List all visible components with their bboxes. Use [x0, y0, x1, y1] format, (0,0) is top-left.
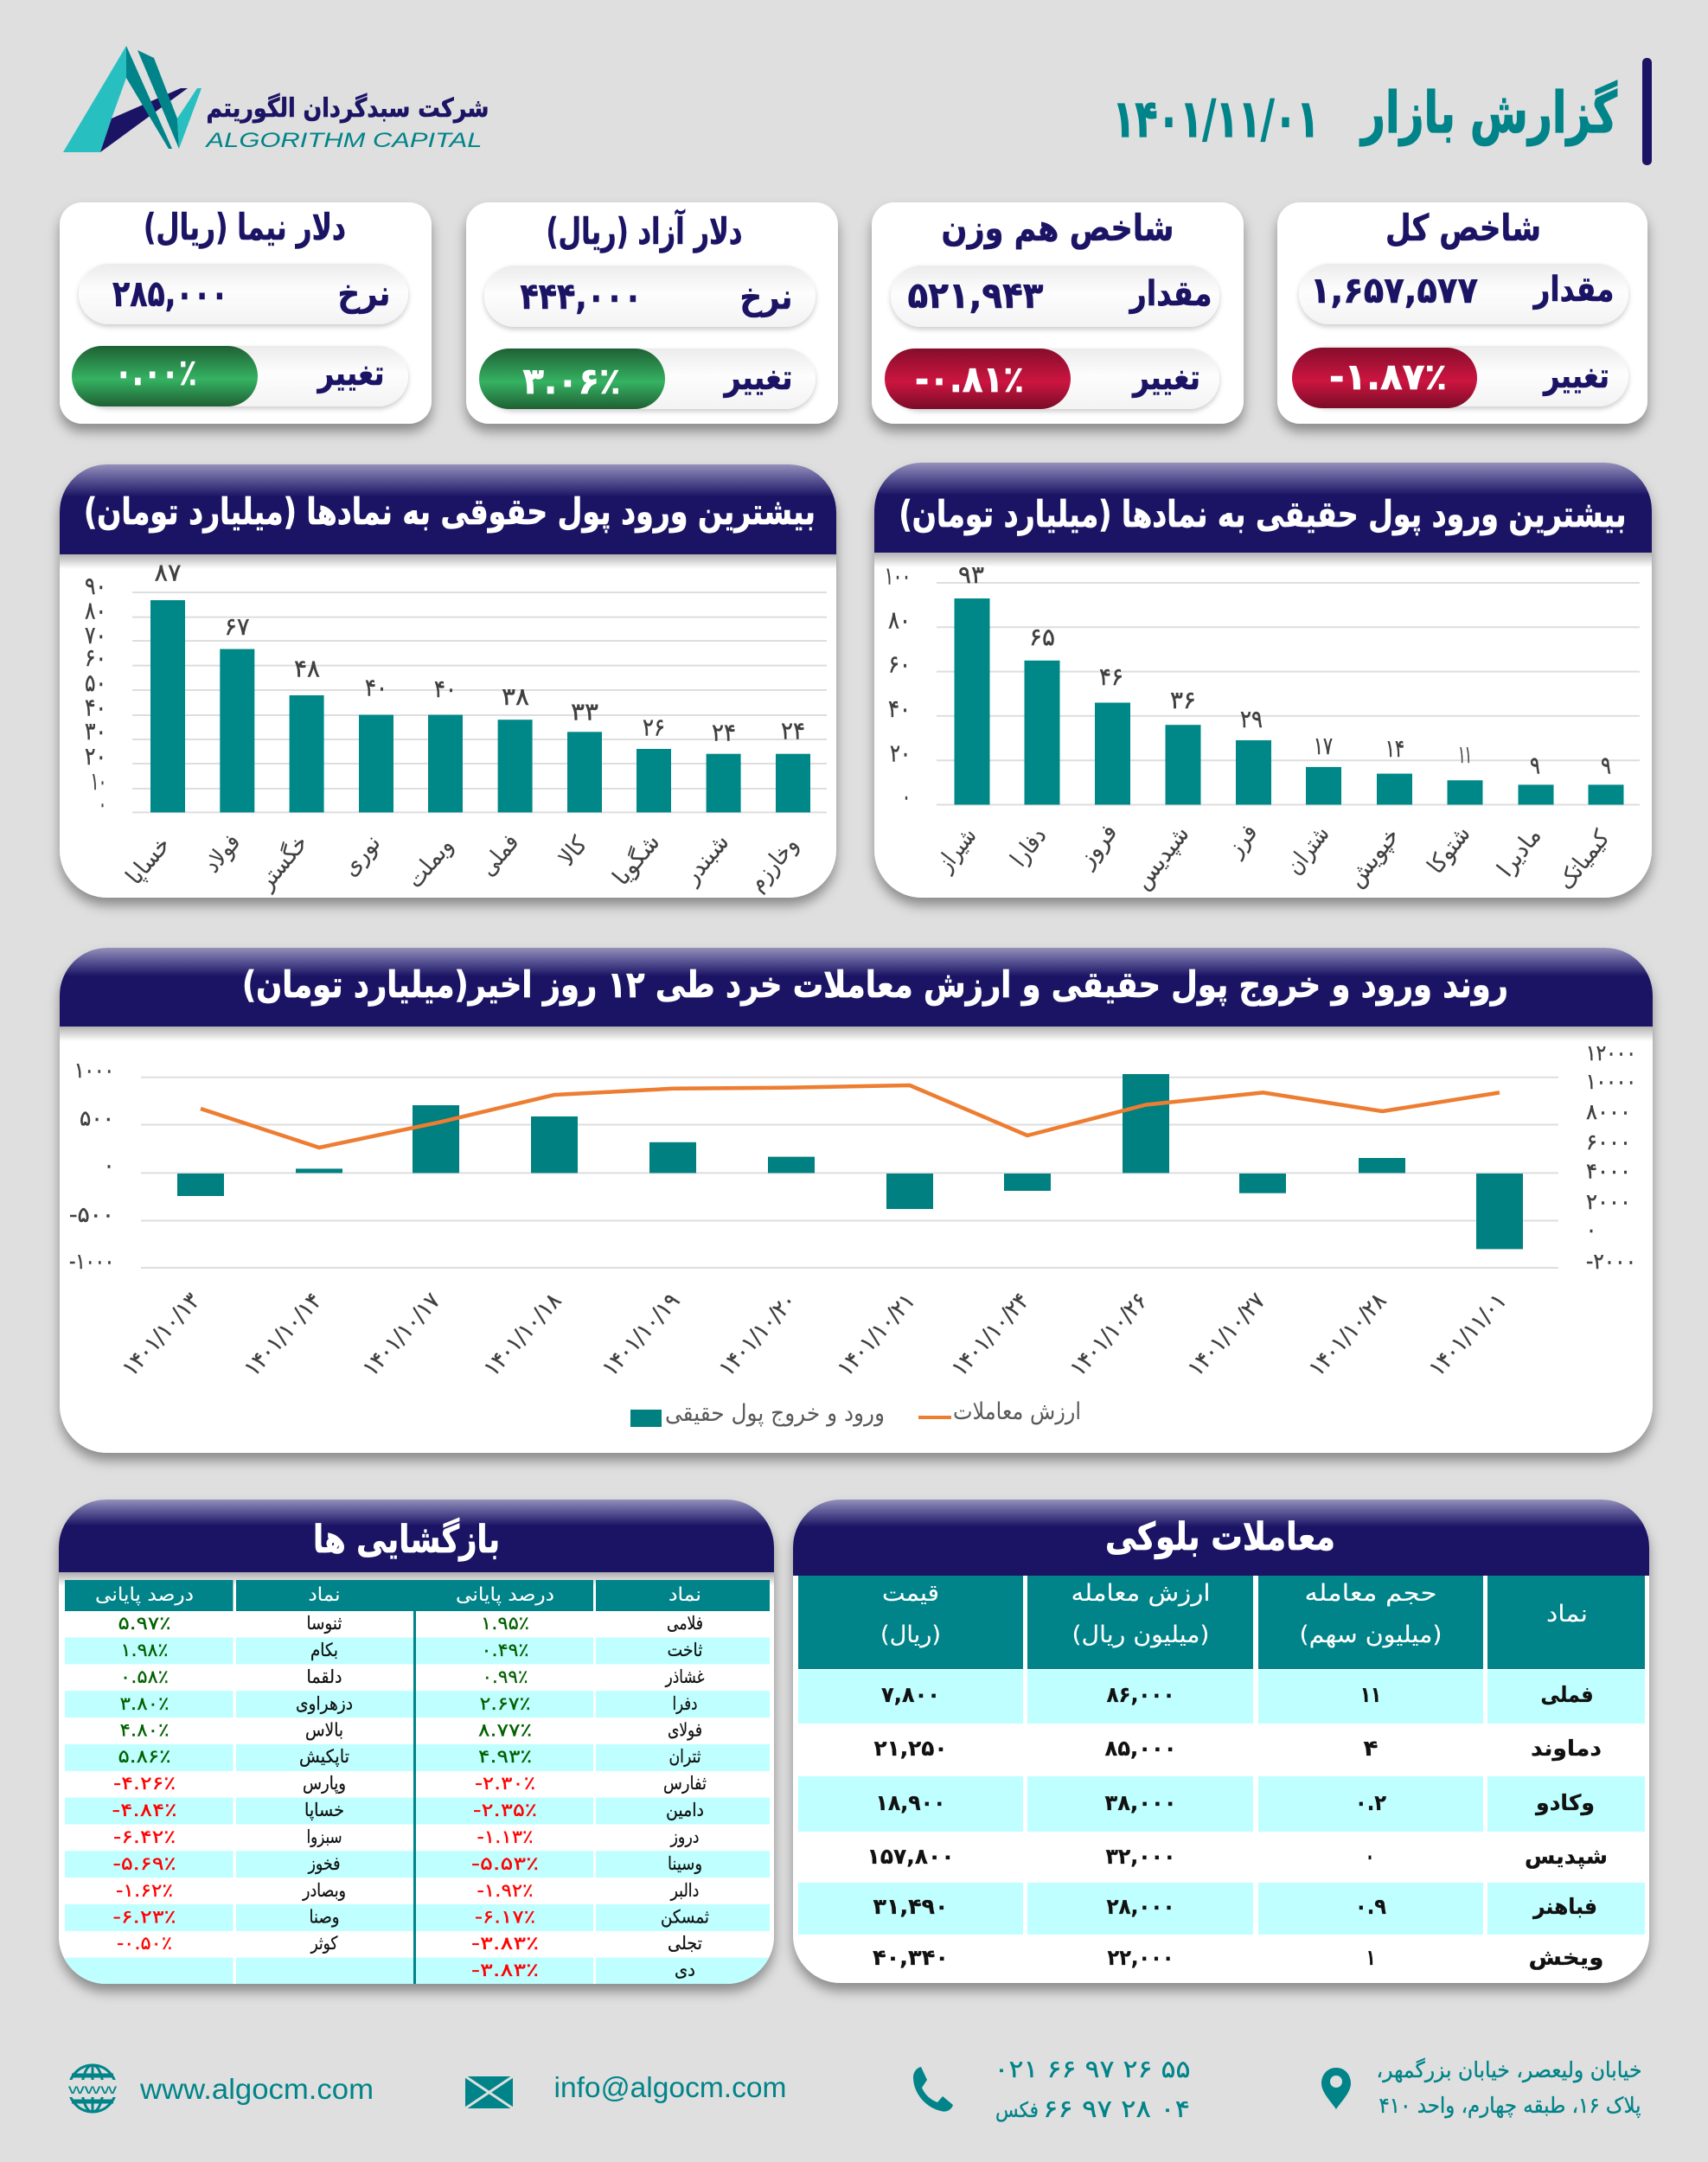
table: reopened symbols: -۲.۳۵٪: [473, 1800, 537, 1820]
bar chart: legal money inflow: خگستر: [251, 829, 313, 896]
card: free dollar: تغییر: [723, 358, 792, 398]
bar chart: legal money inflow: ۳۰: [85, 717, 106, 745]
combo chart: real money flow and trade value: ۱۴۰۱/۱۰/۲۱: [833, 1289, 920, 1381]
bar chart: legal money inflow: ۹۰: [85, 572, 106, 600]
table: block trades: ۱: [1366, 1945, 1375, 1970]
table: reopened symbols: کوثر: [310, 1933, 337, 1954]
table: reopened symbols: فخوز: [308, 1853, 341, 1874]
bar chart: legal money inflow: وخارزم: [743, 832, 803, 897]
card: free dollar: ۴۴۴,۰۰۰: [521, 275, 642, 317]
combo chart: real money flow and trade value: -۱۰۰۰: [69, 1249, 114, 1274]
table: block trades: (میلیون ریال): [1072, 1622, 1209, 1648]
table: reopened symbols: وبصادر: [302, 1880, 346, 1901]
table: reopened symbols: -۱.۹۲٪: [477, 1880, 533, 1901]
combo chart: real money flow and trade value: ۱۴۰۱/۱۰/۲۰: [714, 1289, 802, 1381]
table: reopened symbols: ۱.۹۵٪: [481, 1613, 529, 1634]
table: block trades: ویخش: [1529, 1945, 1603, 1971]
table: reopened symbols: ۱.۹۸٪: [121, 1640, 168, 1660]
card: NIMA dollar: تغییر: [317, 354, 384, 393]
combo chart: real money flow and trade value: ۱۴۰۱/۱۱/۰۱: [1424, 1289, 1512, 1381]
table: block trades: حجم معامله: [1304, 1580, 1437, 1607]
card: total index: شاخص کل: [1385, 207, 1541, 250]
table: reopened symbols: ۵.۹۷٪: [118, 1613, 171, 1634]
combo chart: real money flow and trade value: ۱۰۰۰: [74, 1058, 114, 1083]
bar chart: real money inflow: ۹۳: [958, 560, 984, 589]
table: reopened symbols: دزهراوی: [296, 1693, 353, 1714]
bar chart: legal money inflow: وبملت: [401, 833, 458, 893]
table: block trades: فباهنر: [1532, 1894, 1597, 1920]
table: reopened symbols: ۴.۸۰٪: [119, 1719, 170, 1740]
chart legend: ارزش معاملات: [953, 1398, 1081, 1425]
title: market report and date: گزارش بازار: [1359, 80, 1617, 146]
bar chart: legal money inflow: ۳۳: [571, 698, 598, 726]
bar chart: real money inflow: ۱۰۰: [885, 562, 911, 591]
panel header: 12 day trend: روند ورود و خروج پول حقیقی و ارزش معاملات خرد طی ۱۲ روز اخیر(میلیارد تومان): [242, 963, 1508, 1007]
table: reopened symbols: درصد پایانی: [456, 1584, 554, 1606]
table: reopened symbols: -۴.۸۴٪: [112, 1800, 176, 1820]
table: reopened symbols: ۰.۴۹٪: [481, 1640, 529, 1660]
table: block trades: ۴: [1363, 1736, 1379, 1761]
bar chart: legal money inflow: خساپا: [121, 832, 176, 890]
panel: real money inflow chart: [874, 463, 1652, 898]
table: block trades: ۱۱: [1360, 1682, 1381, 1707]
table: block trades: ۳۱,۴۹۰: [873, 1894, 948, 1919]
bar chart: legal money inflow: ۴۰: [365, 673, 387, 701]
table: reopened symbols: ثفارس: [663, 1773, 707, 1794]
table: reopened symbols: دامین: [666, 1800, 704, 1820]
table: reopened symbols: دی: [675, 1960, 695, 1980]
table: reopened symbols: وپارس: [303, 1773, 346, 1794]
panel: reopened symbols: [59, 1500, 774, 1985]
table: reopened symbols: وصنا: [310, 1906, 339, 1927]
bar chart: legal money inflow: ۵۰: [85, 668, 106, 697]
footer: address: [1321, 2057, 1641, 2119]
table: reopened symbols: -۶.۲۳٪: [112, 1906, 176, 1927]
footer: phone and fax: [913, 2055, 1190, 2123]
bar chart: real money inflow: ۰: [902, 782, 911, 811]
card: NIMA dollar: [60, 202, 432, 424]
bar chart: legal money inflow: ۱۰: [91, 767, 106, 796]
bar chart: legal money inflow: ۴۰: [434, 675, 457, 703]
bar chart: real money inflow: مادیرا: [1492, 822, 1547, 882]
bar chart: real money inflow: کیمیاتک: [1552, 825, 1615, 895]
bar chart: real money inflow: [885, 560, 1640, 895]
table: reopened symbols: -۵.۶۹٪: [112, 1853, 176, 1874]
table: block trades: ۳۲,۰۰۰: [1105, 1844, 1176, 1869]
footer: website: [66, 2065, 374, 2112]
title: market report and date: ۱۴۰۱/۱۱/۰۱: [1112, 89, 1320, 150]
table: reopened symbols: ۲.۶۷٪: [479, 1693, 531, 1714]
icon: globe: [66, 2065, 119, 2112]
table: reopened symbols: نماد: [308, 1584, 341, 1606]
panel header: real money inflow: [874, 463, 1652, 553]
table: block trades: ۴۰,۳۴۰: [873, 1945, 949, 1970]
table: reopened symbols: -۱.۶۲٪: [116, 1880, 173, 1901]
table: block trades: نماد: [1546, 1601, 1588, 1628]
logo: Algorithm Capital: ALGORITHM CAPITAL: [204, 129, 482, 152]
table: reopened symbols: ۰.۵۸٪: [120, 1666, 169, 1687]
bar chart: real money inflow: شپدیس: [1129, 821, 1195, 895]
combo chart: real money flow and trade value: ۱۰۰۰۰: [1586, 1069, 1636, 1094]
table: reopened symbols: دفرا: [673, 1693, 697, 1714]
table: block trades: [798, 1575, 1645, 1971]
bar chart: legal money inflow: ۸۰: [85, 597, 106, 625]
panel header: reopened symbols: بازگشایی ها: [313, 1517, 500, 1562]
icon: globe: www: [67, 2082, 118, 2097]
panel header: 12 day trend: [60, 948, 1653, 1027]
combo chart: real money flow and trade value: ۶۰۰۰: [1586, 1129, 1631, 1155]
table: block trades: ۲۸,۰۰۰: [1107, 1894, 1174, 1919]
table: reopened symbols: ۴.۹۳٪: [478, 1746, 532, 1767]
combo chart: real money flow and trade value: ۱۴۰۱/۱۰/۲۴: [947, 1289, 1034, 1381]
table: reopened symbols: تاپکیش: [299, 1746, 349, 1767]
card: NIMA dollar: ۲۸۵,۰۰۰: [112, 272, 228, 315]
card: equal weight index: ۵۲۱,۹۴۳: [908, 274, 1044, 317]
table: reopened symbols: ۰.۹۹٪: [483, 1666, 528, 1687]
footer: phone and fax: فکس: [995, 2098, 1039, 2122]
footer: address: پلاک ۱۶، طبقه چهارم، واحد ۴۱۰: [1379, 2093, 1641, 2119]
panel: 12 day trend: [60, 948, 1653, 1453]
panel: legal money inflow chart: [60, 464, 836, 898]
bar chart: legal money inflow: ۳۸: [502, 682, 529, 711]
table: reopened symbols: ثاخت: [668, 1640, 703, 1660]
panel: block trades: [793, 1500, 1649, 1983]
icon: envelope: [465, 2076, 513, 2108]
bar chart: real money inflow: ۱۷: [1314, 732, 1333, 760]
bar chart: legal money inflow: ۶۷: [225, 612, 249, 641]
table: block trades: (میلیون سهم): [1299, 1622, 1443, 1648]
bar chart: real money inflow: ۹: [1601, 752, 1611, 780]
bar chart: legal money inflow: ۸۷: [154, 559, 182, 586]
table: reopened symbols: درصد پایانی: [95, 1584, 194, 1606]
combo chart: real money flow and trade value: ۰: [104, 1153, 114, 1178]
table: reopened symbols: بالاس: [305, 1719, 343, 1740]
card: equal weight index: -۰.۸۱٪: [915, 358, 1024, 400]
footer: website: www.algocm.com: [139, 2073, 374, 2105]
table: block trades: (ریال): [880, 1622, 941, 1648]
combo chart: real money flow and trade value: ۲۰۰۰: [1586, 1189, 1631, 1214]
bar chart: legal money inflow: ۴۰: [85, 694, 106, 721]
table: block trades: فملی: [1541, 1682, 1593, 1707]
table: block trades: ۸۶,۰۰۰: [1107, 1682, 1174, 1707]
table: block trades: ۲۲,۰۰۰: [1107, 1945, 1174, 1970]
table: block trades: دماوند: [1531, 1736, 1602, 1762]
bar chart: legal money inflow: شگویا: [607, 828, 665, 891]
table: reopened symbols: -۰.۵۰٪: [117, 1933, 172, 1954]
combo chart: real money flow and trade value: ۱۴۰۱/۱۰/۱۹: [598, 1289, 685, 1381]
bar chart: legal money inflow: کالا: [553, 831, 592, 872]
logo: Algorithm Capital: شرکت سبدگردان الگوریتم: [206, 93, 489, 124]
card: equal weight index: شاخص هم وزن: [941, 207, 1174, 250]
table: block trades: ۸۵,۰۰۰: [1105, 1736, 1176, 1761]
card: free dollar: دلار آزاد (ریال): [547, 209, 742, 253]
bar chart: real money inflow: ۴۶: [1099, 662, 1123, 691]
footer: phone and fax: ۶۶ ۹۷ ۲۸ ۰۴: [1043, 2095, 1190, 2123]
footer: address: خیابان ولیعصر، خیابان بزرگمهر،: [1377, 2057, 1641, 2083]
logo: Algorithm Capital: [63, 46, 489, 152]
bar chart: legal money inflow: نوری: [336, 830, 386, 881]
card: total index: -۱.۸۷٪: [1329, 355, 1447, 398]
bar chart: legal money inflow: فولاد: [199, 829, 246, 878]
bar chart: legal money inflow: ۲۴: [712, 718, 736, 746]
card: equal weight index: [872, 202, 1244, 424]
table: reopened symbols: نماد: [668, 1584, 701, 1606]
bar chart: legal money inflow: ۶۰: [85, 643, 106, 672]
table: reopened symbols: وسینا: [668, 1853, 702, 1874]
bar chart: legal money inflow: ۲۰: [85, 742, 106, 771]
table: block trades: وکادو: [1534, 1790, 1595, 1816]
table: reopened symbols: -۵.۵۳٪: [471, 1853, 539, 1874]
bar chart: real money inflow: ۱۱: [1458, 740, 1472, 769]
panel header: legal money inflow: بیشترین ورود پول حقوقی به نمادها (میلیارد تومان): [84, 490, 816, 534]
bar chart: legal money inflow: ۷۰: [85, 621, 106, 649]
bar chart: real money inflow: ۸۰: [888, 606, 911, 635]
panel header: legal money inflow: [60, 464, 836, 554]
table: block trades: ۰: [1366, 1844, 1374, 1869]
bar chart: real money inflow: ۳۶: [1170, 686, 1196, 714]
table: reopened symbols: ۵.۸۶٪: [118, 1746, 171, 1767]
footer: email: [465, 2071, 787, 2108]
table: reopened symbols: دالبر: [670, 1880, 699, 1901]
table: block trades: ۱۵۷,۸۰۰: [867, 1844, 955, 1869]
table: reopened symbols: [65, 1580, 770, 1985]
bar chart: real money inflow: ۴۰: [888, 694, 911, 723]
card: free dollar: ۳.۰۶٪: [522, 360, 621, 402]
combo chart: real money flow and trade value: ۱۴۰۱/۱۰/۱۳: [118, 1289, 205, 1381]
combo chart: real money flow and trade value: ۱۴۰۱/۱۰/۱۴: [240, 1289, 327, 1381]
card: free dollar: [466, 202, 838, 424]
icon: phone: [913, 2067, 953, 2112]
card: NIMA dollar: نرخ: [337, 274, 391, 314]
card: total index: مقدار: [1532, 270, 1614, 310]
combo chart: real money flow and trade value: ۱۴۰۱/۱۰/۲۸: [1304, 1289, 1391, 1381]
table: reopened symbols: ۸.۷۷٪: [478, 1719, 532, 1740]
table: reopened symbols: -۳.۸۳٪: [471, 1960, 539, 1980]
panel header: reopened symbols: [59, 1500, 774, 1572]
table: reopened symbols: -۴.۲۶٪: [113, 1773, 176, 1794]
bar chart: real money inflow: ۱۴: [1385, 734, 1404, 763]
table: reopened symbols: ثنوسا: [306, 1613, 342, 1634]
combo chart: real money flow and trade value: ۱۴۰۱/۱۰/۲۶: [1065, 1289, 1153, 1381]
table: reopened symbols: -۲.۳۰٪: [475, 1773, 535, 1794]
table: reopened symbols: -۶.۱۷٪: [475, 1906, 535, 1927]
card: free dollar: نرخ: [740, 278, 792, 317]
combo chart: real money flow and trade value: ۱۴۰۱/۱۰/۲۷: [1183, 1289, 1270, 1381]
table: reopened symbols: ثتران: [669, 1746, 701, 1767]
combo chart: real money flow and trade value: -۲۰۰۰: [1586, 1249, 1636, 1274]
combo chart: real money flow and trade value: ۱۴۰۱/۱۰/۱۷: [358, 1289, 445, 1381]
table: reopened symbols: -۳.۸۳٪: [471, 1933, 539, 1954]
table: reopened symbols: دروز: [670, 1826, 699, 1847]
table: reopened symbols: ثمسکن: [661, 1906, 709, 1927]
combo chart: real money flow and trade value: ۱۴۰۱/۱۰/۱۸: [479, 1289, 566, 1381]
bar chart: real money inflow: ۲۰: [890, 739, 911, 768]
footer: email: info@algocm.com: [553, 2071, 787, 2103]
bar chart: legal money inflow: [85, 559, 827, 897]
bar chart: legal money inflow: ۲۶: [643, 713, 665, 742]
table: block trades: ۷,۸۰۰: [881, 1682, 940, 1707]
table: block trades: ۰.۹: [1355, 1894, 1386, 1919]
bar chart: legal money inflow: ۰: [99, 790, 106, 818]
bar chart: real money inflow: ۲۹: [1240, 705, 1263, 733]
footer: phone and fax: ۰۲۱ ۶۶ ۹۷ ۲۶ ۵۵: [995, 2055, 1190, 2083]
table: reopened symbols: خساپا: [304, 1800, 344, 1820]
card: total index: ۱,۶۵۷,۵۷۷: [1310, 269, 1478, 311]
bar chart: real money inflow: ۶۰: [888, 650, 911, 679]
chart legend: [630, 1398, 1081, 1427]
panel header: block trades: [793, 1500, 1649, 1576]
bar chart: legal money inflow: فملی: [475, 829, 524, 881]
title: market report and date: [1112, 58, 1652, 165]
icon: location pin: [1321, 2068, 1351, 2109]
table: reopened symbols: دلقما: [306, 1666, 342, 1687]
card: NIMA dollar: دلار نیما (ریال): [144, 206, 346, 248]
table: block trades: قیمت: [882, 1580, 939, 1607]
combo chart: real money flow and trade value: ۵۰۰: [80, 1106, 114, 1131]
table: reopened symbols: غشاذر: [665, 1666, 705, 1687]
table: reopened symbols: تجلی: [668, 1933, 702, 1954]
bar chart: legal money inflow: ۴۸: [294, 655, 320, 683]
table: reopened symbols: بکام: [310, 1640, 338, 1660]
bar chart: legal money inflow: ۲۴: [781, 717, 805, 745]
table: block trades: ارزش معامله: [1071, 1580, 1211, 1607]
table: block trades: ۳۸,۰۰۰: [1105, 1790, 1176, 1815]
table: reopened symbols: -۶.۴۲٪: [113, 1826, 176, 1847]
bar chart: real money inflow: شتوکا: [1423, 821, 1476, 879]
bar chart: real money inflow: ۹: [1530, 752, 1540, 780]
combo chart: real money flow and trade value: -۵۰۰: [69, 1202, 114, 1227]
bar chart: real money inflow: خپویش: [1342, 822, 1405, 892]
table: block trades: ۱۸,۹۰۰: [875, 1790, 946, 1815]
table: block trades: ۲۱,۲۵۰: [873, 1736, 948, 1761]
bar chart: real money inflow: شیراز: [931, 822, 982, 878]
card: NIMA dollar: ۰.۰۰٪: [114, 351, 197, 393]
combo chart: real money flow and trade value: ۱۲۰۰۰: [1586, 1040, 1636, 1065]
combo chart: real money flow and trade value: [69, 1040, 1636, 1381]
bar chart: real money inflow: دفارا: [1006, 822, 1052, 872]
panel header: block trades: معاملات بلوکی: [1105, 1515, 1335, 1559]
card: equal weight index: مقدار: [1129, 274, 1212, 314]
bar chart: real money inflow: شتران: [1281, 821, 1335, 880]
table: block trades: ۰.۲: [1355, 1790, 1386, 1815]
table: reopened symbols: ۳.۸۰٪: [119, 1693, 170, 1714]
table: reopened symbols: -۱.۱۳٪: [477, 1826, 533, 1847]
combo chart: real money flow and trade value: ۰: [1586, 1218, 1596, 1243]
card: equal weight index: تغییر: [1131, 358, 1200, 398]
bar chart: real money inflow: فرز: [1221, 819, 1263, 863]
card: total index: تغییر: [1542, 356, 1609, 396]
combo chart: real money flow and trade value: ۸۰۰۰: [1586, 1099, 1631, 1124]
bar chart: legal money inflow: شبندر: [677, 829, 734, 891]
table: reopened symbols: سبزوا: [306, 1826, 342, 1847]
chart legend: ورود و خروج پول حقیقی: [665, 1400, 885, 1427]
table: reopened symbols: فولای: [668, 1719, 702, 1740]
table: reopened symbols: فلامی: [667, 1613, 703, 1634]
table: block trades: شپدیس: [1525, 1844, 1608, 1869]
combo chart: real money flow and trade value: ۴۰۰۰: [1586, 1159, 1631, 1183]
card: total index: [1277, 202, 1647, 424]
bar chart: real money inflow: ۶۵: [1029, 623, 1055, 651]
bar chart: real money inflow: فروز: [1072, 819, 1123, 873]
